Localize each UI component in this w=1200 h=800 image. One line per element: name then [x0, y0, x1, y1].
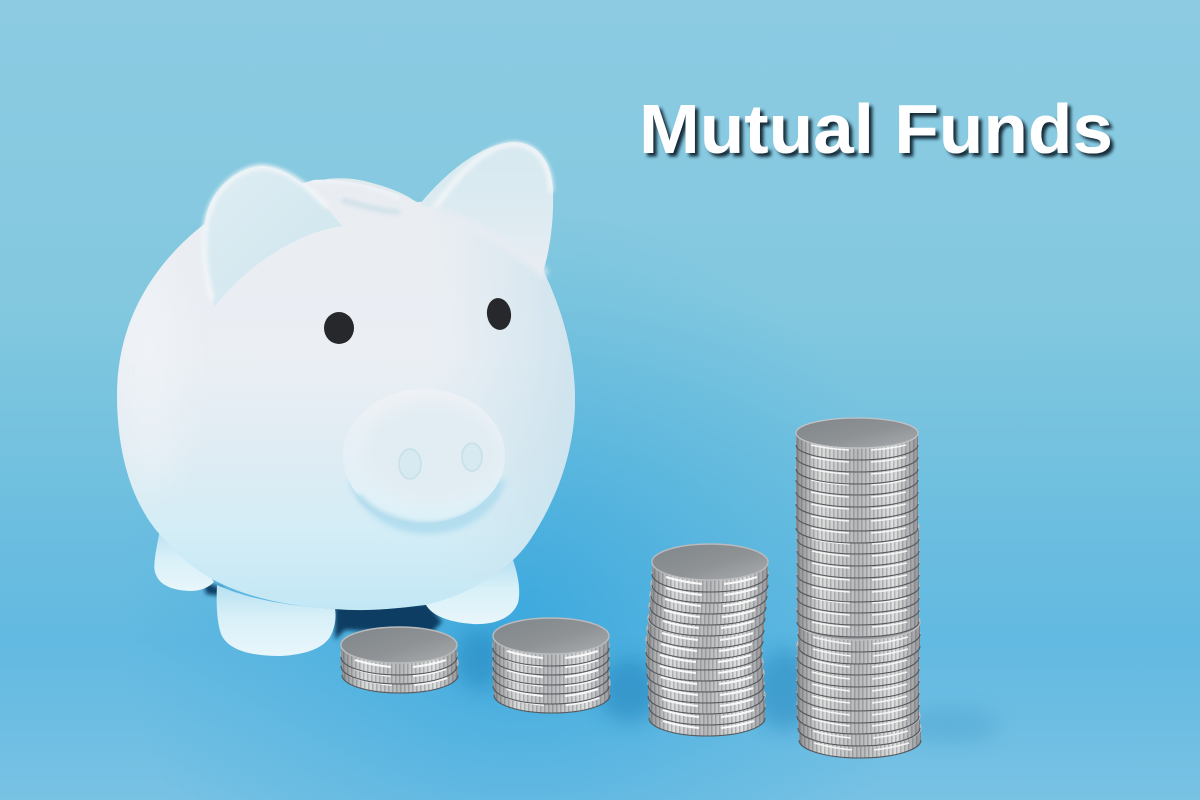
left ear — [204, 166, 342, 306]
eyes — [324, 296, 513, 344]
front left leg — [217, 585, 336, 656]
back right leg — [425, 560, 519, 624]
coin stack 1 — [341, 627, 458, 693]
icon: piggy bank — [117, 142, 580, 656]
body — [117, 180, 575, 610]
shadows on the surface — [455, 630, 1000, 743]
coin stack 3 — [646, 544, 768, 736]
shadow under pig — [204, 582, 442, 640]
coin stack 4 — [796, 418, 921, 758]
back left leg — [154, 530, 214, 591]
coin slot — [310, 178, 420, 225]
title: Mutual Funds — [639, 90, 1113, 168]
right ear — [420, 142, 553, 275]
snout — [343, 389, 506, 534]
coin stack 2 — [493, 618, 610, 713]
body side shading — [120, 180, 580, 580]
